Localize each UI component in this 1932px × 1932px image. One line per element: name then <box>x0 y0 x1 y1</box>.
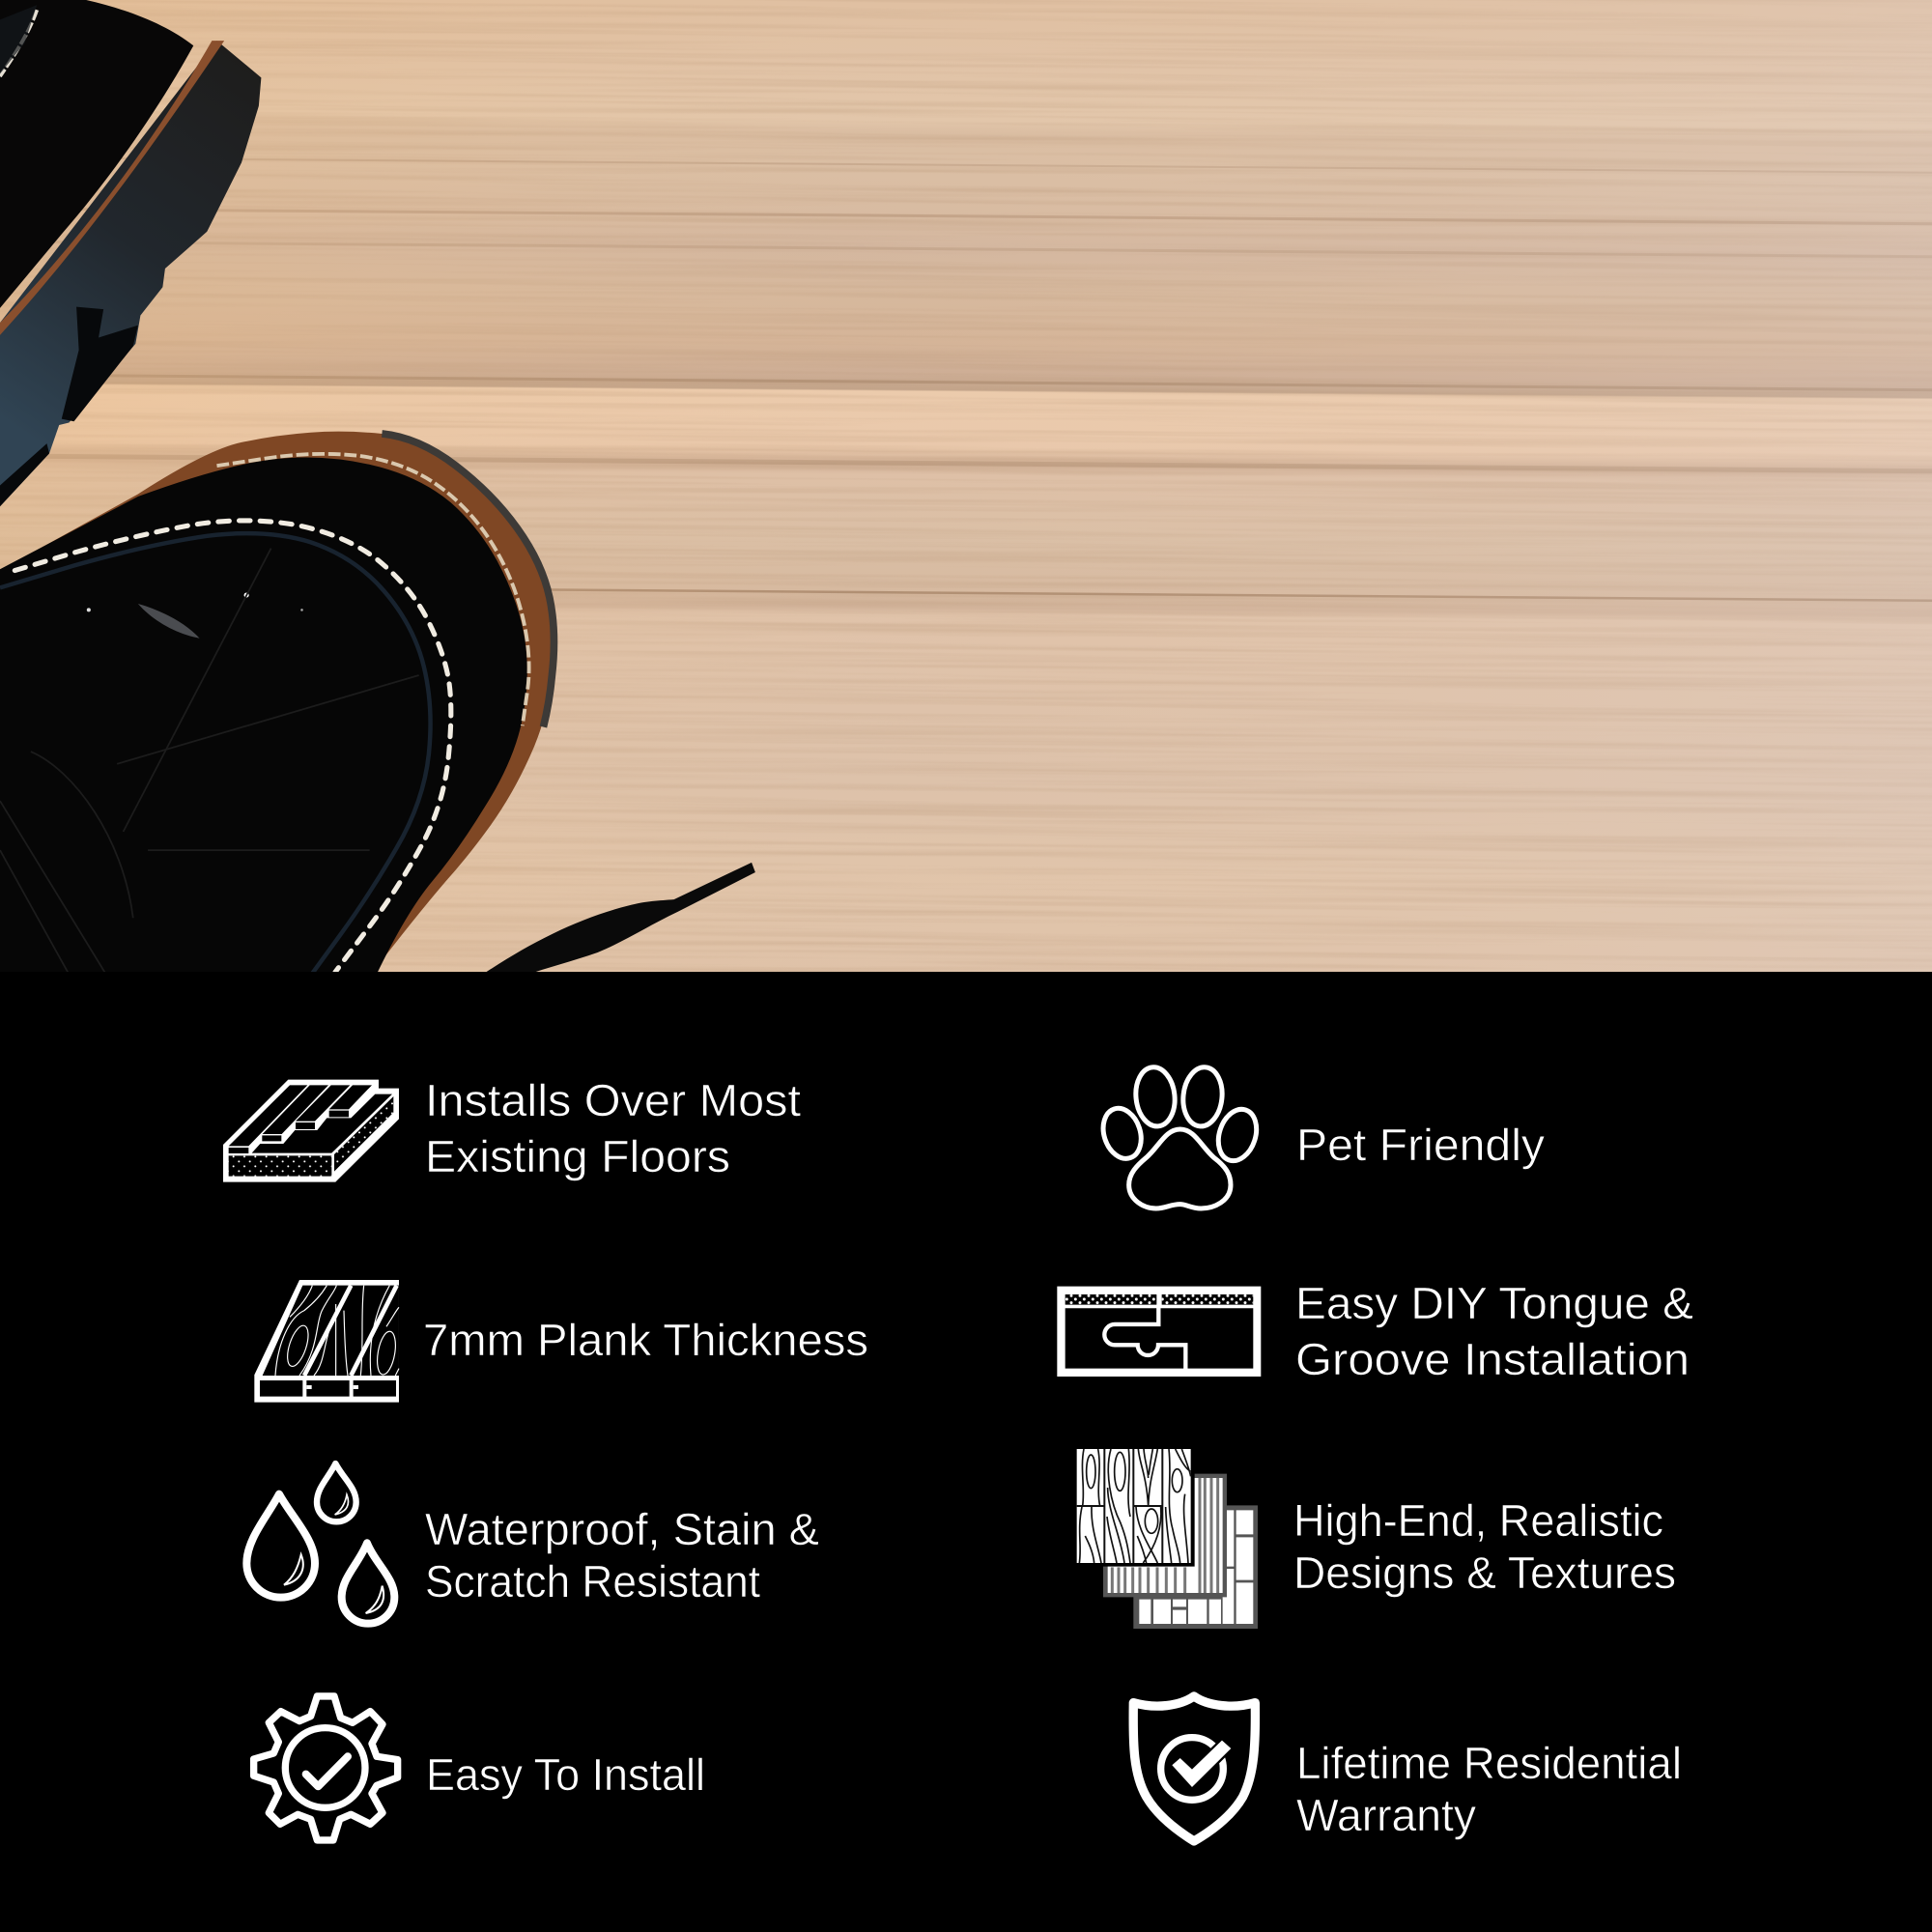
icon: floor layers <box>223 1080 399 1182</box>
text: waterproof stain and scratch resistant <box>425 1504 819 1606</box>
icon: tongue and groove joint <box>1057 1287 1261 1377</box>
text: high-end realistic designs and textures <box>1293 1495 1676 1598</box>
text: installs over most existing floors: Existing Floors <box>425 1131 730 1181</box>
text: waterproof stain and scratch resistant: Scratch Resistant <box>425 1556 760 1606</box>
icon: gear with check <box>254 1696 398 1840</box>
text: lifetime residential warranty: Warranty <box>1296 1790 1476 1840</box>
photo: shoelace <box>480 863 755 976</box>
text: waterproof stain and scratch resistant: Waterproof, Stain & <box>425 1504 819 1554</box>
panel: wood floor photo <box>0 0 1932 1078</box>
text: easy diy tongue and groove installation: Easy DIY Tongue & <box>1295 1278 1693 1328</box>
icon: design and texture swatches <box>1077 1449 1258 1629</box>
text: pet friendly: Pet Friendly <box>1296 1120 1545 1170</box>
text: easy diy tongue and groove installation <box>1295 1278 1693 1384</box>
photo: lower shoe <box>0 432 554 976</box>
text: high-end realistic designs and textures: Designs & Textures <box>1293 1548 1676 1598</box>
icon: paw print <box>1097 1065 1263 1208</box>
text: installs over most existing floors: Installs Over Most <box>425 1075 801 1125</box>
text: easy to install: Easy To Install <box>426 1749 705 1800</box>
text: high-end realistic designs and textures: High-End, Realistic <box>1293 1495 1663 1546</box>
icon: warranty shield <box>1133 1696 1255 1841</box>
icon: plank thickness <box>254 1280 399 1403</box>
text: lifetime residential warranty: Lifetime Residential <box>1296 1738 1682 1788</box>
text: installs over most existing floors <box>425 1075 801 1181</box>
text: easy diy tongue and groove installation: Groove Installation <box>1295 1334 1690 1384</box>
text: 7mm plank thickness: 7mm Plank Thickness <box>423 1315 868 1365</box>
photo: upper shoe <box>0 0 261 506</box>
panel: black feature band <box>0 972 1932 1932</box>
icon: water drops <box>246 1463 394 1624</box>
text: lifetime residential warranty <box>1296 1738 1682 1840</box>
